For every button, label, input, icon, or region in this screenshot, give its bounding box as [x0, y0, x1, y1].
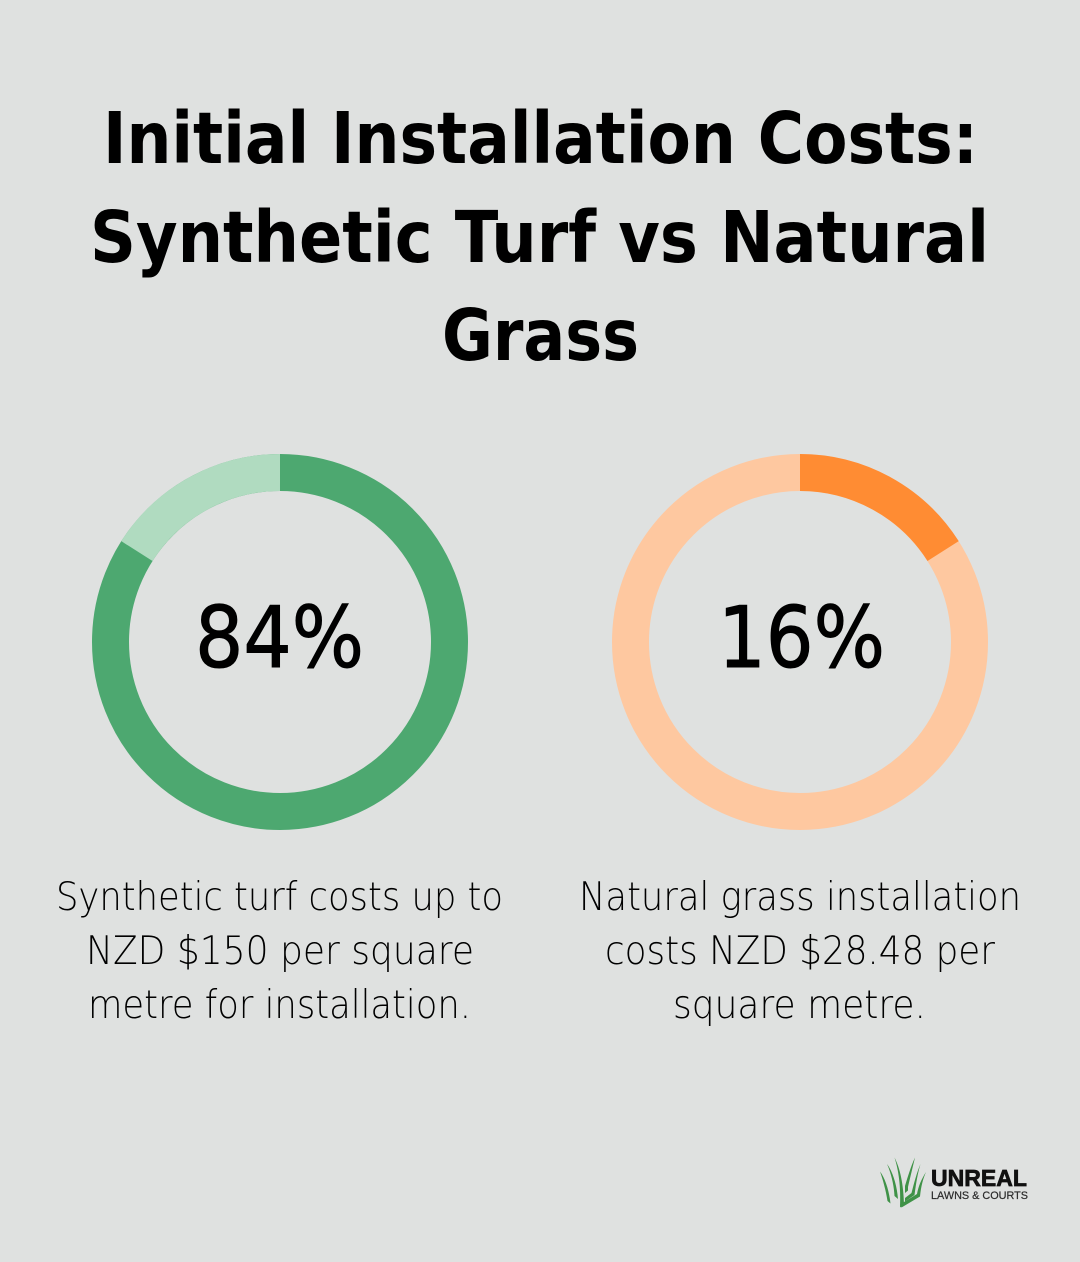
title: [90, 97, 989, 377]
description: natural grass: [579, 874, 1021, 1028]
stat: 84%: 84%: [195, 589, 364, 688]
panel: synthetic turf: [56, 472, 503, 1028]
panel: natural grass: [579, 472, 1021, 1028]
description: synthetic turf: Synthetic turf costs up to: [56, 874, 503, 920]
wordmark: UNREAL: [931, 1165, 1027, 1191]
tagline: LAWNS & COURTS: [931, 1190, 1028, 1202]
title: Synthetic Turf vs Natural: [90, 196, 989, 279]
title: Initial Installation Costs:: [103, 97, 978, 180]
description: synthetic turf: [56, 874, 503, 1028]
title: Grass: [442, 294, 639, 377]
description: synthetic turf: NZD $150 per square: [86, 928, 474, 974]
icon: grass blades: [880, 1158, 926, 1208]
donut chart: 84%: [110, 472, 450, 812]
description: natural grass: Natural grass installation: [579, 874, 1021, 920]
stat: 16%: 16%: [718, 589, 885, 688]
description: natural grass: square metre.: [673, 982, 926, 1028]
description: synthetic turf: metre for installation.: [88, 982, 471, 1028]
logo: Unreal Lawns & Courts: [880, 1158, 1028, 1208]
description: natural grass: costs NZD $28.48 per: [605, 928, 996, 974]
donut chart: 16%: [630, 472, 970, 812]
